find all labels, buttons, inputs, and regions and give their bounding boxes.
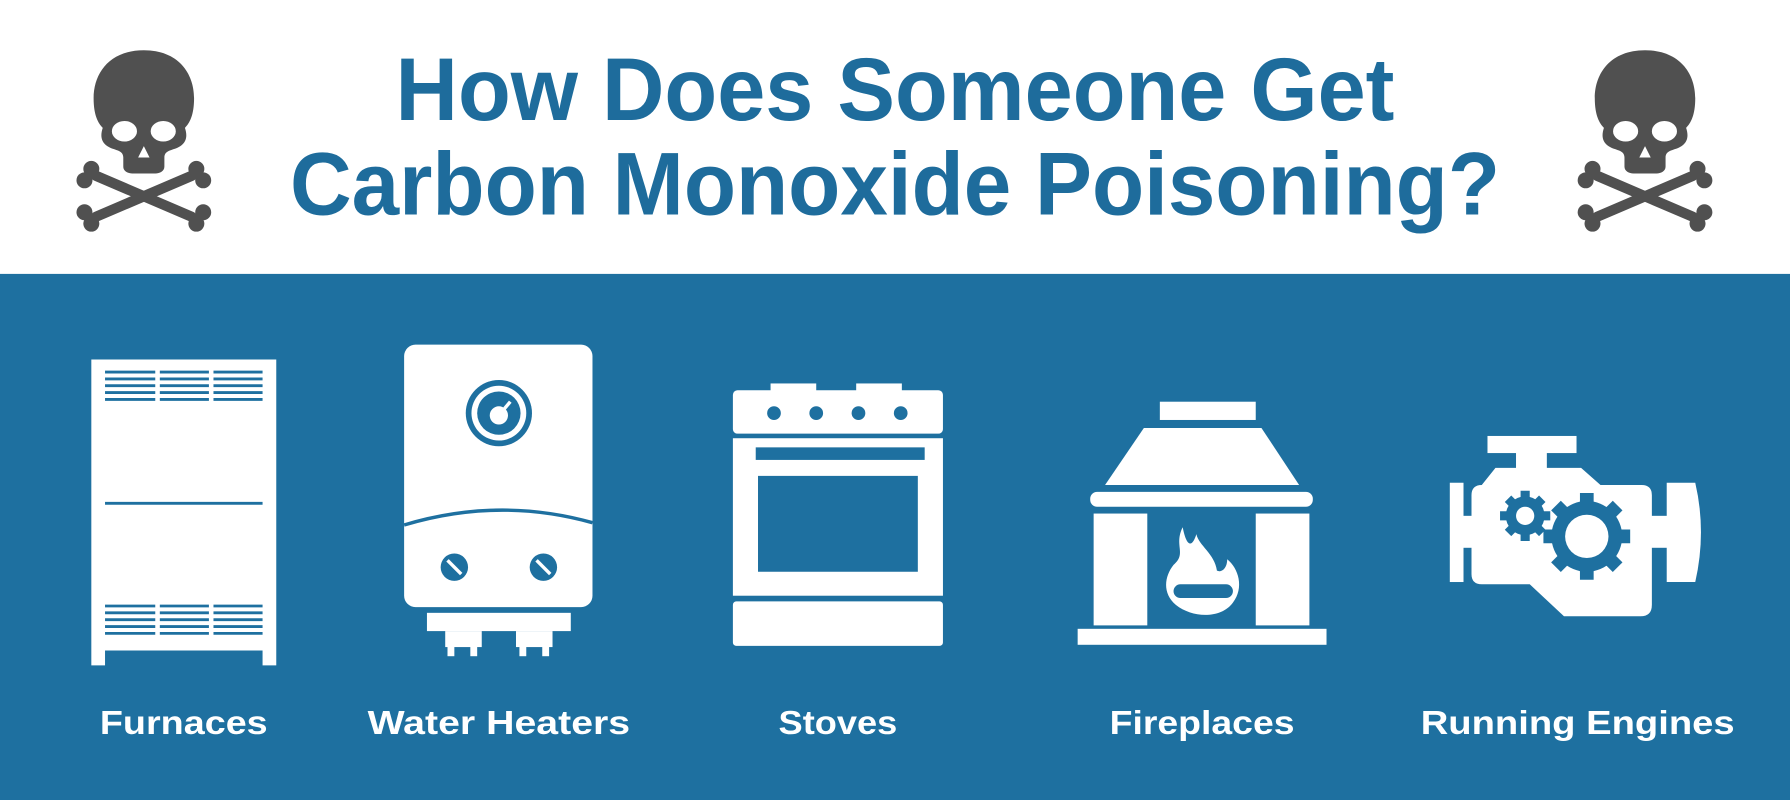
label: Stoves: Stoves: [779, 705, 897, 742]
label: Water Heaters: Water Heaters: [368, 705, 630, 742]
label: Furnaces: Furnaces: [100, 705, 268, 742]
blue band background: [0, 274, 1790, 800]
title: Carbon Monoxide Poisoning?: [290, 134, 1500, 234]
title: [290, 39, 1500, 234]
title: How Does Someone Get: [396, 39, 1394, 139]
icon: stove: [733, 383, 943, 646]
icon: skull left: [76, 50, 211, 232]
icon: furnace: [91, 359, 276, 665]
icon: fireplace: [1078, 402, 1327, 645]
icon: skull right: [1578, 50, 1712, 232]
label: Running Engines: Running Engines: [1421, 705, 1735, 742]
icon: engine: [1450, 436, 1701, 616]
icon: water heater: [404, 345, 592, 656]
label: Fireplaces: Fireplaces: [1110, 705, 1295, 742]
